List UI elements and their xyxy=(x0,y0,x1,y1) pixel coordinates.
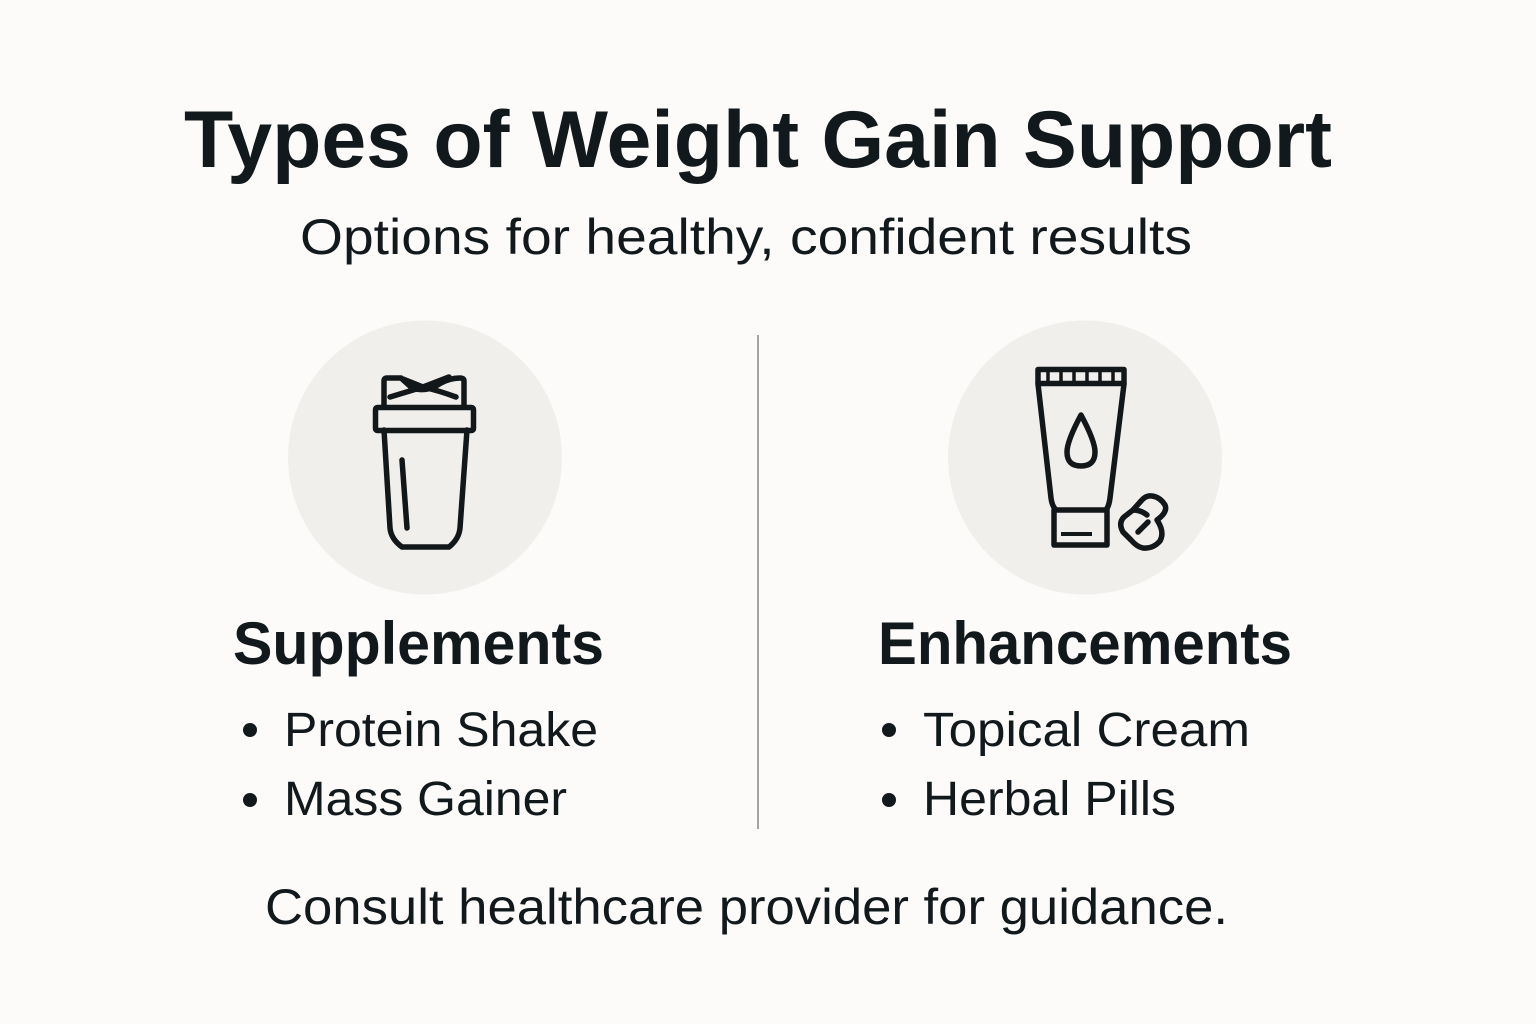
heading: supplements: Supplements xyxy=(233,610,604,677)
list: enhancements: Topical Cream xyxy=(923,704,1250,757)
list: enhancements xyxy=(882,704,1250,826)
icon: protein shaker xyxy=(288,320,562,594)
title: Types of Weight Gain Support xyxy=(184,95,1332,185)
list: supplements: Protein Shake xyxy=(284,704,598,757)
divider xyxy=(757,335,759,829)
footer note: Consult healthcare provider for guidance. xyxy=(265,879,1228,935)
panel: supplements xyxy=(233,320,604,826)
subtitle: Options for healthy, confident results xyxy=(300,209,1192,265)
panel: enhancements xyxy=(878,320,1292,826)
heading: enhancements: Enhancements xyxy=(878,610,1292,677)
list: supplements xyxy=(243,704,598,826)
list: enhancements: Herbal Pills xyxy=(923,773,1176,826)
list: supplements: Mass Gainer xyxy=(284,773,567,826)
icon: cream tube and pills xyxy=(948,320,1222,594)
